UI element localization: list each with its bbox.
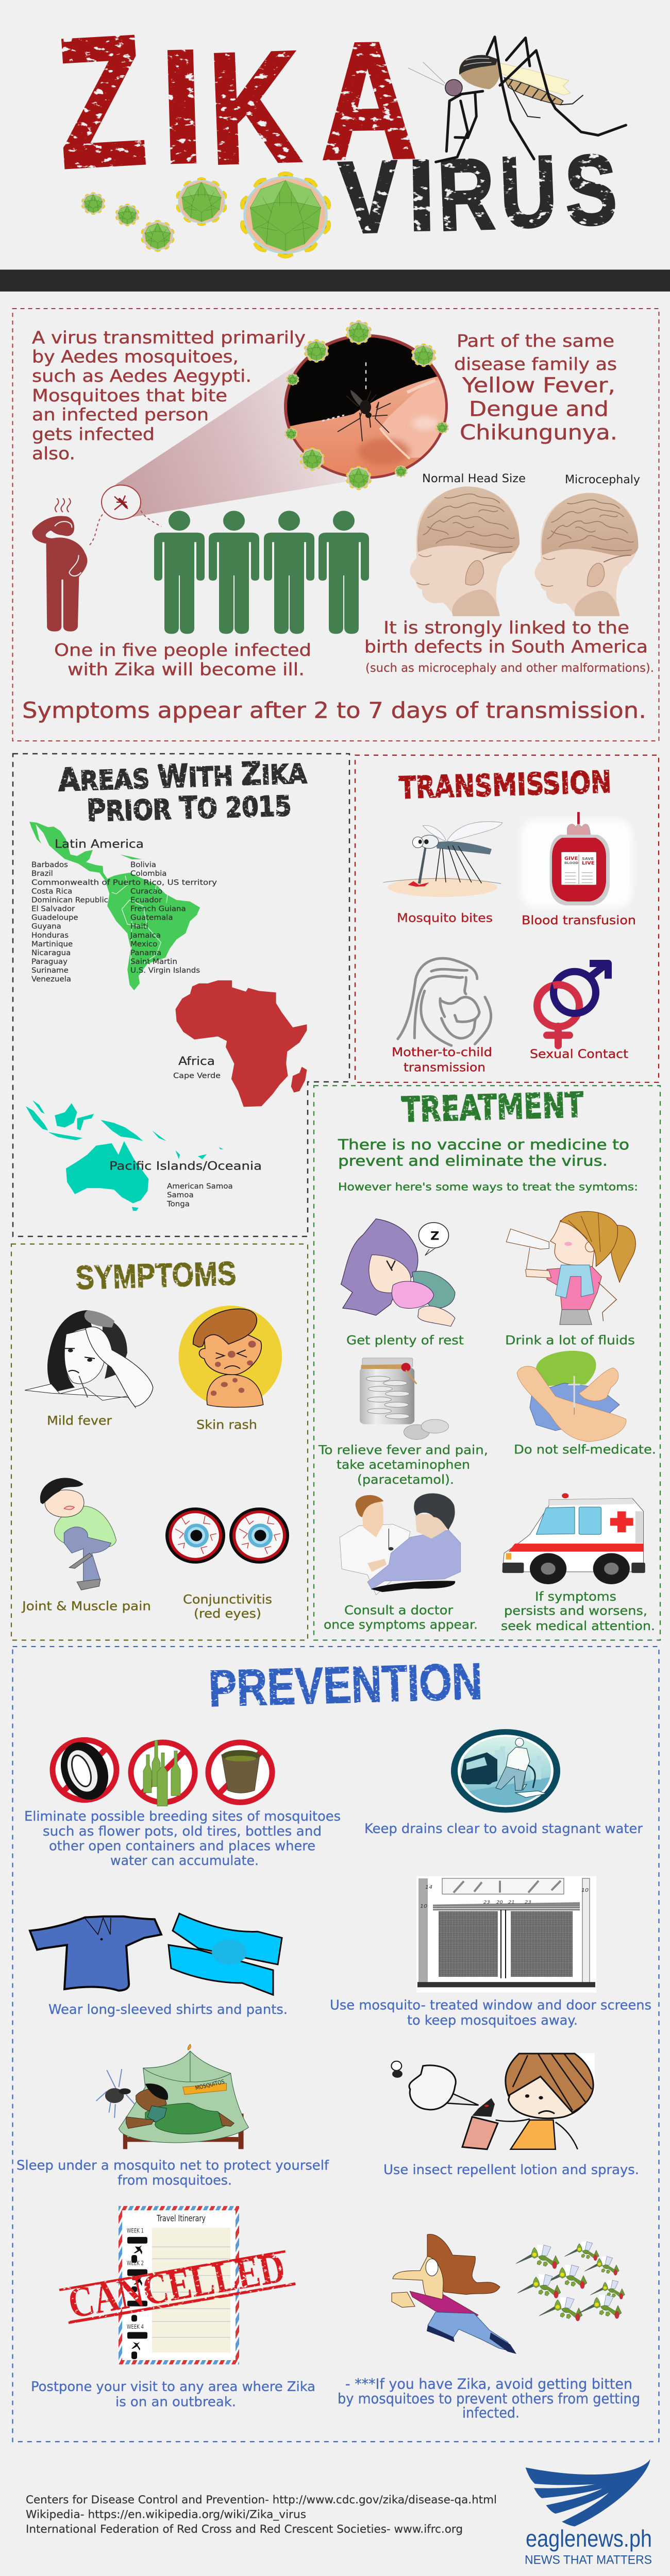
icon: window screen drawing: 10 <box>420 1904 427 1909</box>
virus markers around photo <box>284 320 449 490</box>
text on blood bag: GIVE <box>564 856 578 861</box>
text: sleep under net <box>16 2158 329 2188</box>
list: Latin America countries left: Nicaragua <box>31 949 71 957</box>
list: Oceania countries: Tonga <box>166 1200 190 1208</box>
heading: areas with Zika <box>58 754 307 828</box>
label: Cape Verde: Cape Verde <box>173 1072 221 1080</box>
itinerary weeks: WEEK 2 <box>127 2260 144 2266</box>
text: if you have Zika <box>338 2375 640 2421</box>
panel: transmission <box>355 755 659 1082</box>
text: virus description: such as Aedes Aegypti. <box>32 366 252 386</box>
logo wing mark <box>526 2459 650 2527</box>
icon: red eyes <box>165 1507 289 1564</box>
list: Latin America countries right: Curacao <box>130 888 162 895</box>
icon: girl drinking <box>506 1211 635 1325</box>
text: sleep under net: Sleep under a mosquito net to protect yourself <box>16 2158 329 2173</box>
list: Latin America countries left: Paraguay <box>31 958 68 966</box>
icon: mosquito biting <box>383 822 502 897</box>
logo: eaglenews.ph <box>525 2459 652 2567</box>
text: persistent symptoms <box>501 1589 655 1633</box>
text: insect repellent: Use insect repellent lotion and sprays. <box>383 2162 639 2178</box>
text: disease family: Chikungunya. <box>460 420 617 444</box>
list: Latin America countries right: Colombia <box>130 870 166 878</box>
panel: introduction <box>12 309 659 741</box>
text: wear long sleeves: Wear long-sleeved shirts and pants. <box>48 2002 288 2018</box>
title: ZIKA: K <box>206 19 302 197</box>
icon: mother and child <box>398 958 491 1045</box>
label: blood transfusion: Blood transfusion <box>522 913 636 927</box>
header divider bar <box>0 269 670 292</box>
text: consult a doctor <box>324 1603 478 1632</box>
icon: pill jar <box>360 1358 448 1439</box>
text: virus description: also. <box>32 444 75 464</box>
icon: girl with fever <box>25 1310 153 1408</box>
label: mosquito bites: Mosquito bites <box>397 911 493 925</box>
icon: window screen drawing <box>416 1876 596 1992</box>
text: disease family: disease family as <box>454 354 617 375</box>
list: Latin America countries right: Bolivia <box>130 861 156 869</box>
list: Latin America countries left: Costa Rica <box>31 888 72 895</box>
icon: no containers <box>208 1742 272 1802</box>
text: relieve fever: take acetaminophen <box>337 1458 470 1472</box>
label: mother-to-child transmission <box>392 1045 492 1074</box>
title: VIRUS: R <box>435 138 497 252</box>
itinerary weeks: WEEK 4 <box>127 2323 144 2330</box>
list: Latin America countries right: Haiti <box>130 923 148 930</box>
text on blood bag: LIVE <box>582 860 595 866</box>
text: disease family <box>454 331 617 444</box>
text: postpone visit <box>31 2379 315 2410</box>
text: virus description: Mosquitoes that bite <box>32 386 227 406</box>
text: relieve fever: To relieve fever and pain, <box>318 1443 488 1457</box>
text: birth defects: birth defects in South America <box>364 637 648 657</box>
icon: ambulance <box>502 1493 645 1584</box>
icon: mosquito flight path <box>90 485 161 545</box>
panel: areas with Zika <box>13 754 349 1236</box>
text: virus description: A virus transmitted primarily <box>32 328 306 348</box>
itinerary transport icons <box>127 2237 147 2359</box>
text: eliminate breeding sites <box>24 1809 341 1869</box>
heading: areas with Zika: AREAS WITH ZIKA <box>58 754 307 798</box>
labels: rest and fluids: Drink a lot of fluids <box>505 1333 635 1347</box>
text: no vaccine: There is no vaccine or medicine to <box>338 1136 629 1153</box>
labels: rest and fluids: Get plenty of rest <box>346 1333 464 1347</box>
icon: sick person <box>32 498 87 632</box>
label: microcephaly: Microcephaly <box>565 473 640 486</box>
text: birth defects: It is strongly linked to the <box>383 618 629 638</box>
icon: running woman <box>392 2234 516 2354</box>
text on blood bag: BLOOD <box>564 861 579 865</box>
list: Latin America countries left: El Salvador <box>31 905 75 913</box>
title: ZIKA <box>51 0 417 207</box>
panel: treatment <box>314 1086 660 1640</box>
icon: window screen drawing: 23 <box>483 1900 490 1905</box>
list: Latin America countries right: U.S. Virgin Islands <box>130 967 200 975</box>
text: one in five: One in five people infected <box>54 640 311 660</box>
icon: long pants <box>169 1913 282 1995</box>
text: no vaccine: However here's some ways to treat the symtoms: <box>338 1180 638 1193</box>
list: Latin America countries right: Jamaica <box>130 931 161 940</box>
label: sexual contact: Sexual Contact <box>530 1047 628 1061</box>
title: VIRUS: I <box>407 139 436 252</box>
text: symptoms timing: Symptoms appear after 2 to 7 days of transmission. <box>22 698 646 723</box>
stamp: cancelled: CANCELLED <box>64 2243 289 2327</box>
list: Latin America countries left <box>31 861 217 984</box>
heading: travel itinerary: Travel Itinerary <box>156 2214 206 2224</box>
label: conjunctivitis: (red eyes) <box>194 1606 261 1621</box>
list: Latin America countries left: Barbados <box>31 861 68 869</box>
title: ZIKA: I <box>158 16 206 196</box>
text: treated screens: Use mosquito- treated window and door screens <box>330 1998 651 2013</box>
text: disease family: Yellow Fever, <box>462 374 615 397</box>
icon: child with skin rash <box>179 1306 282 1408</box>
icon: no tires <box>53 1736 116 1805</box>
text: one in five: with Zika will become ill. <box>68 660 305 680</box>
list: Latin America countries right <box>130 861 200 975</box>
text: disease family: Dengue and <box>469 397 609 421</box>
label: do not self-medicate: Do not self-medicate. <box>514 1443 656 1456</box>
icon: window screen drawing: 23 <box>525 1900 531 1905</box>
title: ZIKA: Z <box>51 0 151 207</box>
icon: small virus 3 <box>141 220 175 252</box>
list: Latin America countries left: Venezuela <box>31 976 71 984</box>
label: Latin America: Latin America <box>55 838 144 851</box>
list: Latin America countries left: Suriname <box>31 967 69 975</box>
icon: window screen drawing: 21 <box>508 1900 515 1905</box>
text: if you have Zika: - ***If you have Zika, avoid getting bitten <box>345 2375 632 2392</box>
title: VIRUS: V <box>337 139 400 255</box>
label: normal head size: Normal Head Size <box>422 472 526 485</box>
icon: window screen drawing: 10 <box>581 1887 589 1893</box>
text on blood bag: SAVE <box>582 856 594 861</box>
list: Latin America countries left: Honduras <box>31 931 69 940</box>
list: Oceania countries: American Samoa <box>167 1183 233 1191</box>
list: Latin America countries left: Guadeloupe <box>31 914 78 922</box>
text: no vaccine: prevent and eliminate the virus. <box>338 1152 608 1169</box>
icon: gender symbols <box>537 963 608 1046</box>
map: Pacific Islands and Oceania <box>26 1100 224 1211</box>
icon: boy with joint pain <box>40 1478 116 1590</box>
photo: mosquito biting skin <box>283 336 454 480</box>
text: one in five <box>54 640 311 680</box>
illustration: microcephaly head <box>534 493 639 616</box>
heading: prevention: PREVENTION <box>208 1653 483 1718</box>
panel: prevention <box>12 1647 659 2442</box>
text: virus description: by Aedes mosquitoes, <box>32 347 239 367</box>
text: persistent symptoms: If symptoms <box>535 1589 616 1604</box>
heading: treatment: TREATMENT <box>401 1086 584 1130</box>
text: postpone visit: Postpone your visit to any area where Zika <box>31 2379 315 2395</box>
label: Pacific Islands/Oceania: Pacific Islands/Oceania <box>109 1160 262 1173</box>
list: Latin America countries right: Saint Martin <box>130 958 177 966</box>
illustration: normal head <box>410 486 520 616</box>
title: VIRUS: U <box>498 134 559 249</box>
heading: areas with Zika: PRIOR TO 2015 <box>86 787 292 828</box>
map: Africa <box>175 980 307 1107</box>
text: keep drains clear: Keep drains clear to avoid stagnant water <box>364 1821 643 1837</box>
text: postpone visit: is on an outbreak. <box>115 2394 236 2410</box>
title: ZIKA: A <box>319 8 417 193</box>
text on blood bag <box>564 856 595 866</box>
sources <box>26 2494 497 2536</box>
icon: small virus 2 <box>115 204 140 226</box>
text: virus description <box>32 328 306 464</box>
label: Africa: Africa <box>178 1055 215 1068</box>
icon: small virus 1 <box>81 192 106 215</box>
text: virus description: gets infected <box>32 425 155 444</box>
icon: no bottles <box>131 1740 195 1806</box>
icon: medium virus <box>175 177 228 226</box>
label: skin rash: Skin rash <box>196 1418 257 1432</box>
list: Latin America countries left: Dominican Republic <box>31 896 108 904</box>
stamp: cancelled <box>58 2242 296 2328</box>
sources: Wikipedia- https://en.wikipedia.org/wiki/Zika_virus <box>26 2508 306 2521</box>
icon: travel itinerary <box>119 2206 239 2364</box>
text: sleep under net: from mosquitoes. <box>118 2173 232 2188</box>
icon: long-sleeved shirt <box>30 1917 161 1991</box>
text: relieve fever <box>318 1443 488 1487</box>
text: disease family: Part of the same <box>457 331 614 351</box>
text: eliminate breeding sites: other open containers and places where <box>49 1838 315 1854</box>
list: Latin America countries left: Martinique <box>31 940 73 948</box>
icon: large virus <box>239 172 332 258</box>
labels: rest and fluids <box>346 1333 635 1347</box>
sources: Centers for Disease Control and Prevention- http://www.cdc.gov/zika/disease-qa.html <box>26 2494 497 2506</box>
icon: window screen drawing: 20 <box>496 1900 503 1905</box>
text: Z in speech bubble: Z <box>430 1230 439 1243</box>
text: eliminate breeding sites: water can accumulate. <box>110 1853 259 1869</box>
panel: symptoms <box>11 1244 308 1640</box>
list: Oceania countries: Samoa <box>167 1192 194 1199</box>
text: treated screens: to keep mosquitoes away. <box>407 2013 578 2028</box>
text: consult a doctor: Consult a doctor <box>344 1603 454 1617</box>
list: Latin America countries right: Panama <box>130 949 161 957</box>
list: Latin America countries left: Guyana <box>31 923 61 930</box>
icon: mosquito swarm <box>515 2242 625 2321</box>
list: Oceania countries <box>166 1183 233 1208</box>
itinerary weeks <box>127 2227 144 2330</box>
icon: girl with insect spray <box>391 2053 595 2149</box>
text: treated screens <box>330 1998 651 2028</box>
icon: sleeping girl <box>341 1219 455 1326</box>
label: conjunctivitis: Conjunctivitis <box>183 1592 272 1606</box>
text: persistent symptoms: persists and worsens, <box>504 1604 647 1618</box>
text: consult a doctor: once symptoms appear. <box>324 1617 478 1632</box>
icon: window screen drawing: 14 <box>425 1885 432 1890</box>
map: Latin America <box>29 822 200 990</box>
icon: large mosquito <box>408 37 626 162</box>
title: VIRUS <box>337 134 618 255</box>
label: joint and muscle pain: Joint & Muscle pain <box>21 1599 151 1613</box>
text: persistent symptoms: seek medical attention. <box>501 1619 655 1633</box>
text: eliminate breeding sites: such as flower pots, old tires, bottles and <box>43 1824 322 1839</box>
text: virus description: an infected person <box>32 405 209 425</box>
list: Latin America countries right: Ecuador <box>130 896 162 904</box>
sources: International Federation of Red Cross and Red Crescent Societies- www.ifrc.org <box>26 2523 463 2536</box>
icon: drain worker <box>451 1729 560 1813</box>
icon: mosquito net over bed <box>96 2044 248 2149</box>
text: if you have Zika: infected. <box>462 2404 520 2421</box>
text: birth defects <box>364 618 654 675</box>
itinerary weeks: WEEK 1 <box>127 2227 144 2234</box>
icon: doctor and patient <box>340 1493 461 1595</box>
magnifier cone <box>115 358 346 517</box>
label: conjunctivitis <box>183 1592 272 1621</box>
heading: symptoms: SYMPTOMS <box>75 1255 237 1297</box>
icon: injection <box>517 1351 626 1442</box>
title: VIRUS: S <box>563 134 618 246</box>
list: Latin America countries right: Mexico <box>130 940 158 948</box>
text: relieve fever: (paracetamol). <box>357 1472 454 1487</box>
label: mild fever: Mild fever <box>47 1413 112 1428</box>
icon: four healthy people <box>154 511 369 634</box>
list: Latin America countries left: Brazil <box>31 870 53 878</box>
logo tagline: NEWS THAT MATTERS <box>525 2553 652 2567</box>
text on mosquito net sign: MOSQUITOS <box>194 2078 225 2091</box>
label: mother-to-child transmission: transmission <box>404 1060 485 1074</box>
label: mother-to-child transmission: Mother-to-child <box>392 1045 492 1059</box>
list: Latin America countries right: Guatemala <box>130 914 173 922</box>
text: no vaccine <box>338 1136 638 1193</box>
text: eliminate breeding sites: Eliminate possible breeding sites of mosquitoes <box>24 1809 341 1824</box>
icon: blood bag <box>521 812 632 908</box>
list: Latin America countries left: Commonwealth of Puerto Rico, US territory <box>31 879 217 887</box>
list: Latin America countries right: French Guiana <box>130 905 186 913</box>
